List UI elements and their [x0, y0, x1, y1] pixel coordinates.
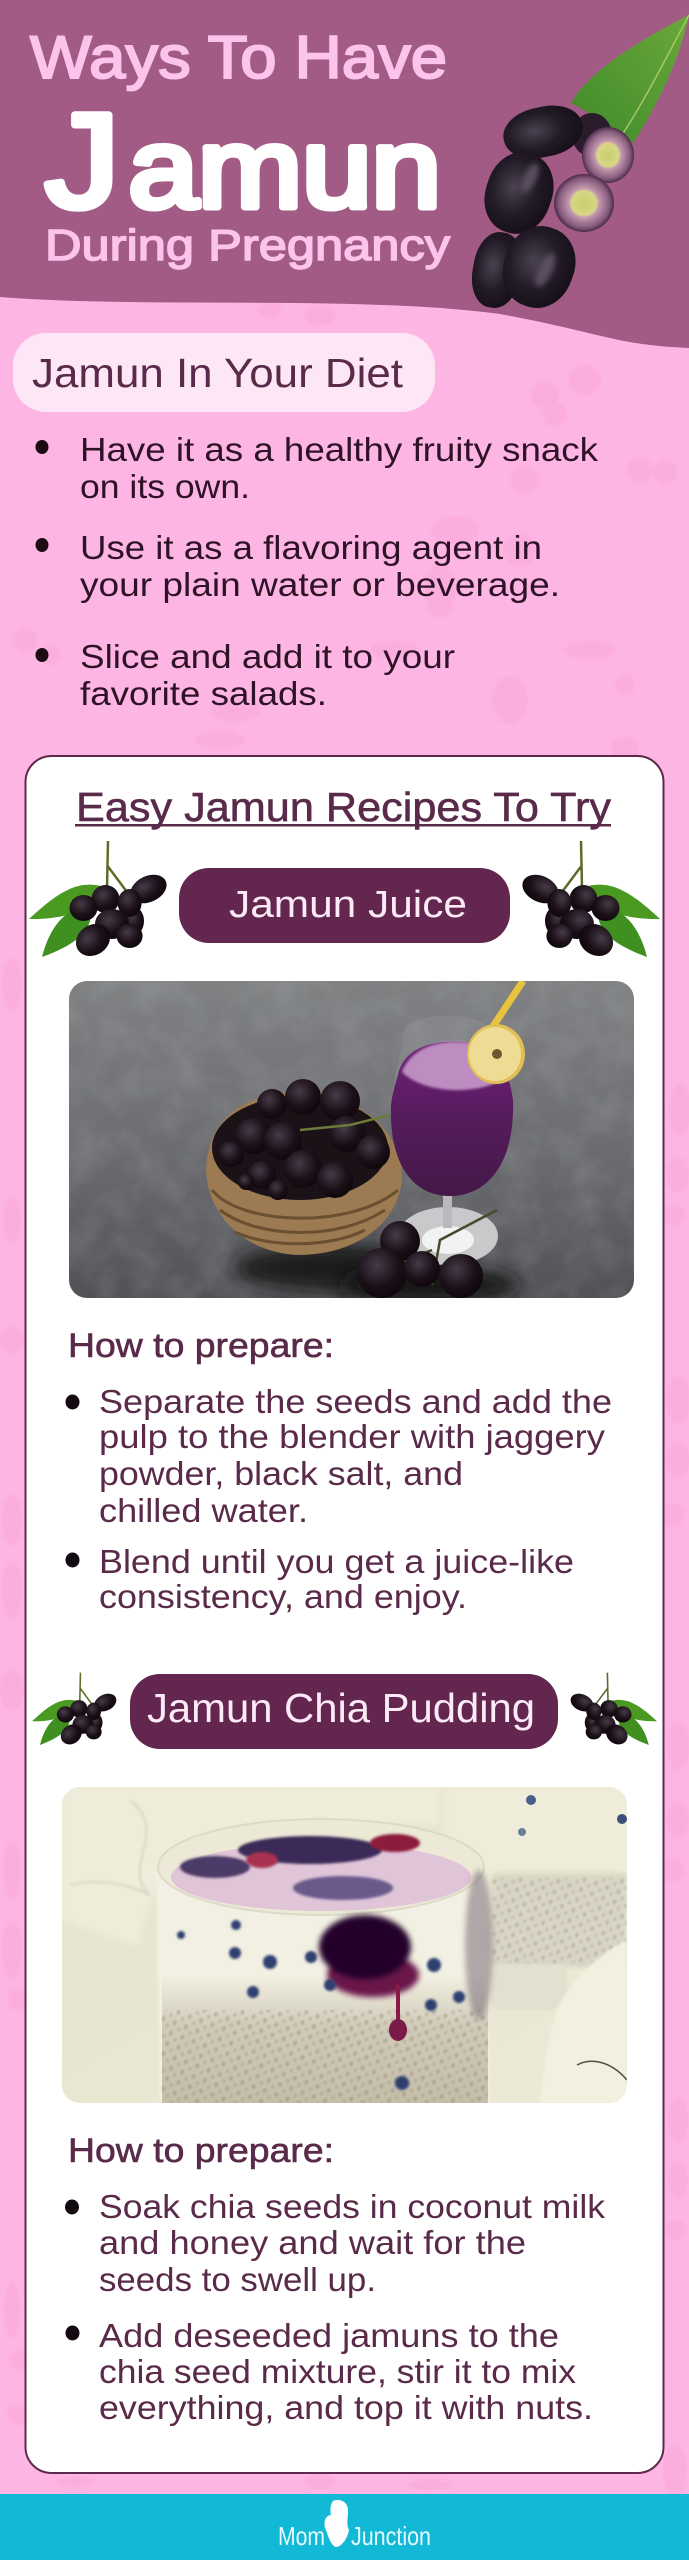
heading: Easy Jamun Recipes To Try: Easy Jamun Recipes To Try: [76, 784, 612, 830]
logo: MomJunction: Junction: [351, 2521, 431, 2551]
header banner: [0, 0, 689, 348]
title: Jamun: [45, 87, 441, 236]
logo: MomJunction: [278, 2500, 431, 2551]
bullet list: diet tips: [36, 431, 599, 712]
bullet list: diet tips: favorite salads.: [80, 675, 327, 712]
pill: Jamun Juice: [179, 868, 510, 943]
bullet list: pudding steps: seeds to swell up.: [99, 2261, 376, 2298]
pill: Jamun Chia Pudding: [130, 1674, 558, 1749]
heading pill: Jamun In Your Diet: [13, 333, 435, 412]
bullet list: diet tips: Have it as a healthy fruity snack: [80, 431, 599, 468]
bullet list: juice steps: powder, black salt, and: [99, 1455, 463, 1492]
bullet list: pudding steps: [65, 2188, 606, 2426]
bullet list: diet tips: Use it as a flavoring agent in: [80, 529, 542, 566]
pill: Jamun Juice: Jamun Juice: [229, 884, 467, 926]
pill: Jamun Chia Pudding: Jamun Chia Pudding: [147, 1685, 535, 1731]
footer bar: [0, 2494, 689, 2560]
bullet list: pudding steps: chia seed mixture, stir it to mix: [99, 2353, 577, 2390]
icon: jamun bunch right: [518, 841, 660, 963]
heading pill: Jamun In Your Diet: Jamun In Your Diet: [32, 350, 404, 396]
title: During Pregnancy: [45, 221, 450, 270]
icon: small jamun bunch right: [568, 1673, 657, 1749]
logo: MomJunction: Mom: [278, 2521, 325, 2551]
icon: jamun bunch left: [29, 841, 171, 963]
title: Ways To Have: [30, 24, 447, 91]
icon: small jamun bunch left: [32, 1673, 119, 1749]
bullet list: pudding steps: Add deseeded jamuns to the: [99, 2317, 559, 2354]
bullet list: pudding steps: Soak chia seeds in coconut milk: [99, 2188, 606, 2225]
icon: jamun fruits and leaf: [467, 15, 689, 317]
panel: recipes card: [26, 756, 664, 2473]
bullet list: juice steps: chilled water.: [99, 1492, 308, 1529]
bullet list: juice steps: Separate the seeds and add the: [99, 1383, 612, 1420]
photo: jamun chia pudding glass: [62, 1787, 634, 2103]
subheading: how to prepare pudding: How to prepare:: [68, 2132, 334, 2170]
bullet list: diet tips: your plain water or beverage.: [80, 566, 560, 603]
photo: jamun juice glass and basket: [69, 981, 634, 1303]
bullet list: diet tips: on its own.: [80, 468, 250, 505]
subheading: how to prepare juice: How to prepare:: [68, 1327, 334, 1365]
bullet list: pudding steps: and honey and wait for the: [99, 2224, 526, 2261]
bullet list: juice steps: Blend until you get a juice-like: [99, 1543, 574, 1580]
bullet list: pudding steps: everything, and top it with nuts.: [99, 2389, 593, 2426]
bullet list: juice steps: [66, 1383, 612, 1615]
bullet list: diet tips: Slice and add it to your: [80, 638, 455, 675]
bullet list: juice steps: consistency, and enjoy.: [99, 1578, 467, 1615]
title: [30, 24, 450, 270]
bullet list: juice steps: pulp to the blender with jaggery: [99, 1418, 606, 1455]
